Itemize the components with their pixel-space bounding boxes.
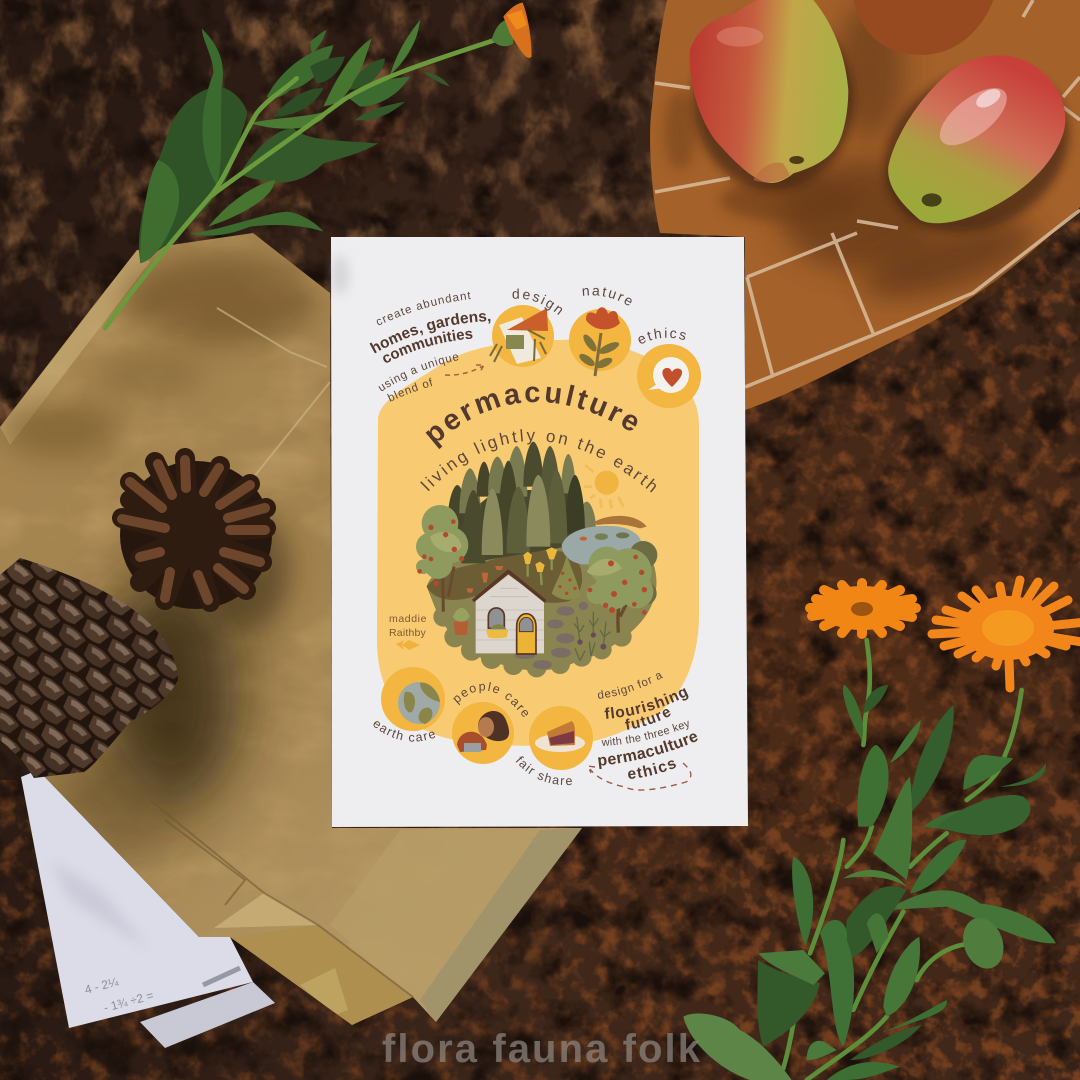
circle: people care (452, 702, 514, 764)
title: permaculture: permaculture (426, 384, 638, 450)
circle: fair share (529, 706, 593, 770)
label: design: design (512, 288, 562, 315)
ground (427, 538, 656, 677)
flower pots (467, 566, 503, 593)
marigold: right (932, 580, 1080, 688)
closing text: design for a: design for a (598, 673, 663, 699)
apple: left (690, 0, 853, 190)
label: ethics: ethics (638, 328, 686, 344)
intro text: communities: communities (383, 330, 472, 363)
closing text: future: future (625, 709, 670, 730)
tissue paper (0, 230, 590, 1030)
print: paper sheet (326, 237, 748, 827)
leaf: large dark (139, 87, 247, 260)
stepping stones (515, 602, 588, 669)
plant: top-left stem with bud (105, 3, 532, 328)
right apple tree (587, 541, 657, 633)
intro text: using a unique: using a unique (378, 354, 458, 391)
label: nature: nature (582, 287, 632, 306)
intro text: homes, gardens: homes, gardens, (370, 312, 490, 354)
bud (492, 3, 532, 58)
circle: nature (569, 307, 631, 376)
main stem (105, 40, 495, 328)
potted plant (453, 608, 470, 635)
conifer forest (447, 442, 596, 563)
bud (956, 912, 1010, 974)
white paper scraps (21, 770, 275, 1048)
circle: earth care (381, 667, 445, 731)
closing text: permaculture: permaculture (598, 734, 698, 770)
tulips and berry bush (523, 547, 580, 600)
leaf: narrow upright (202, 28, 223, 185)
shadow: under top plant (230, 100, 420, 225)
closing text: with the three key: with the three key (602, 720, 688, 746)
left apple tree (416, 505, 468, 612)
illustration: homestead (416, 442, 657, 677)
cottage (473, 571, 545, 654)
flower hedge (595, 516, 647, 528)
handwritten notes on paper: - 1¾ ÷2 = (102, 988, 155, 1015)
signature: Maddie Raithby (389, 613, 427, 650)
handwritten notes on paper (83, 968, 240, 1015)
circle: ethics (637, 344, 701, 408)
closing text: ethics: ethics (628, 760, 676, 779)
yellow blob background (377, 338, 699, 746)
signature: Maddie Raithby: Raithby (389, 627, 427, 639)
apple: top (853, 0, 993, 55)
signature: Maddie Raithby: maddie (389, 613, 427, 625)
intro text: blend of: blend of (387, 378, 432, 402)
arrow: ethics to fair share (588, 763, 691, 790)
plant: lower-right marigold stems (683, 640, 1056, 1080)
intro text: create abundant: create abundant (376, 292, 471, 326)
vegetable patch (574, 612, 611, 661)
label: fair share: fair share (516, 756, 572, 786)
subtitle: living lightly on the earth: living lightly on the earth (420, 429, 656, 492)
circle: design (490, 305, 554, 367)
label: people care: people care (453, 682, 528, 717)
leaf: left (140, 160, 179, 263)
stems (783, 640, 1022, 1080)
label: earth care: earth care (374, 721, 436, 742)
pine cone: upper (120, 458, 272, 609)
pine cone: lower (0, 558, 178, 778)
closing text: flourishing: flourishing (604, 688, 688, 719)
arrow: blend to design (445, 365, 484, 375)
leaves (683, 685, 1056, 1080)
dark undergrowth (427, 551, 582, 603)
pond (562, 526, 642, 564)
handwritten notes on paper: 4 - 2¼ (83, 974, 121, 997)
sun (584, 465, 623, 508)
marigold: left (810, 583, 916, 634)
apple: right (855, 35, 1080, 265)
watermark: flora fauna folk: flora fauna folk (382, 1027, 701, 1071)
leaves: upper cluster (190, 20, 450, 236)
orange checked cloth (650, 0, 1080, 410)
